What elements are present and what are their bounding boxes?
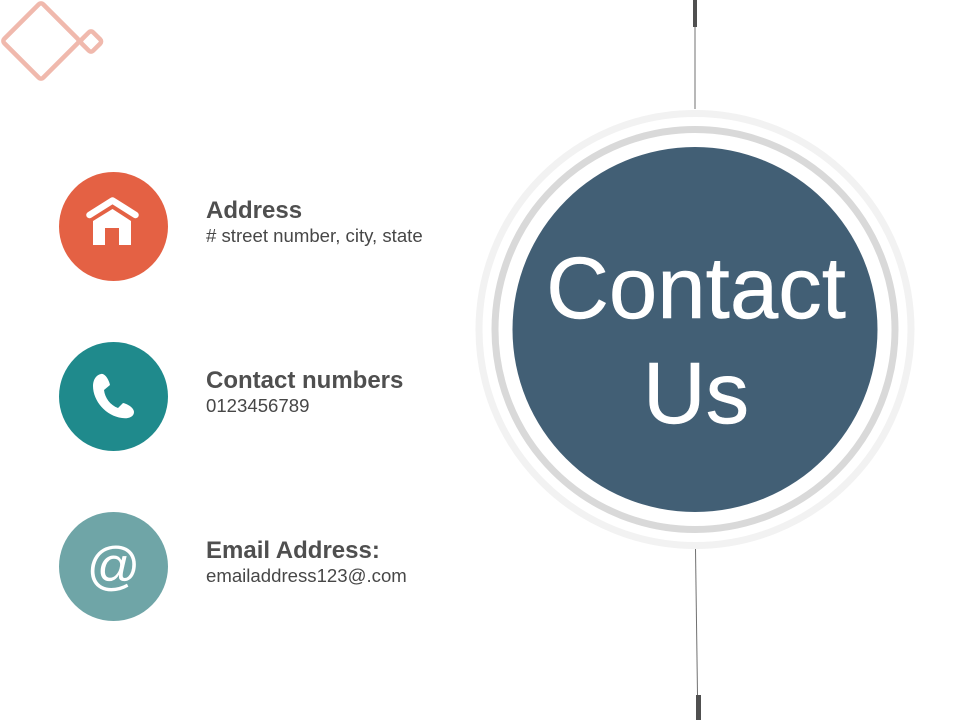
bottom connector line (695, 549, 701, 720)
icon: phone (59, 342, 168, 451)
text block: address (206, 197, 423, 246)
top connector line (693, 0, 697, 109)
icon: home (59, 172, 168, 281)
heading: contact numbers: Contact numbers (206, 367, 403, 394)
contact us circle: Us (643, 345, 749, 442)
email detail: emailaddress123@.com (206, 565, 407, 586)
phone number: 0123456789 (206, 395, 309, 416)
address detail: # street number, city, state (206, 225, 423, 246)
heading: email address: Email Address: (206, 537, 380, 564)
decorative diamonds (1, 1, 104, 81)
icon: at sign (59, 512, 168, 621)
heading: address: Address (206, 197, 302, 224)
contact us circle: Contact (546, 240, 846, 337)
text block: email (206, 537, 407, 586)
text block: contact numbers (206, 367, 403, 416)
icon: at sign: @ (87, 537, 140, 596)
contact us circle (476, 110, 914, 549)
